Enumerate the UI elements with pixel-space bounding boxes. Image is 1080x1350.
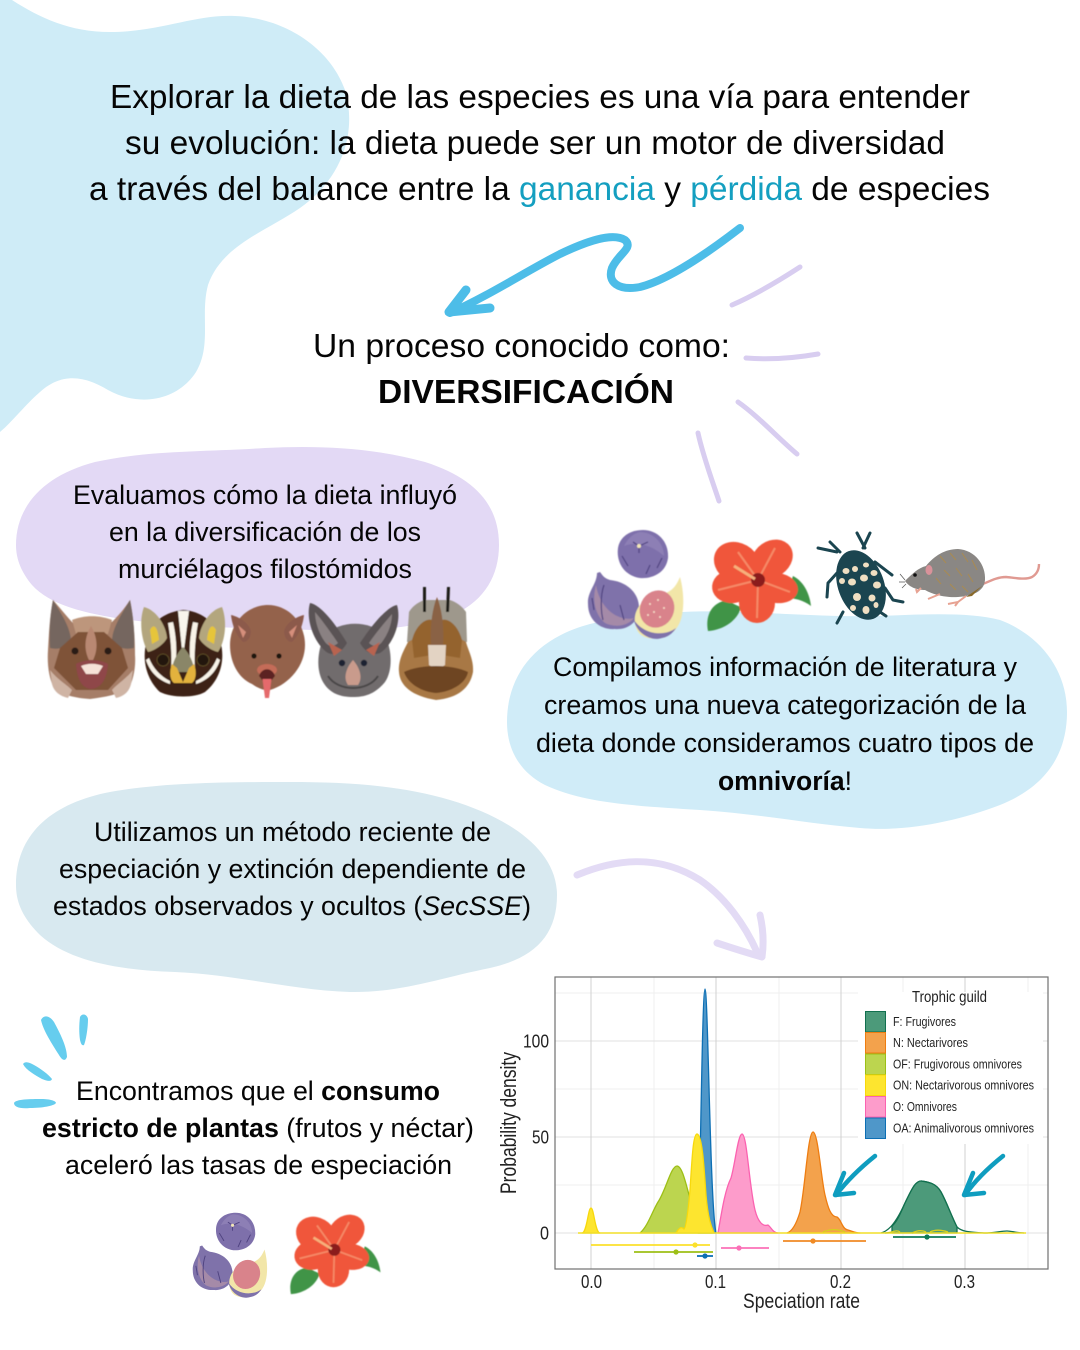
panel: grey-blue bubble — [16, 782, 557, 992]
text: grey-blue bubble: estados observados y ocultos (SecSSE) — [53, 891, 531, 921]
icon: hibiscus — [706, 532, 811, 631]
text: conclusion: estricto de plantas (frutos y néctar) — [42, 1113, 474, 1143]
chart legend — [858, 989, 1043, 1144]
chart: x axis labels: 0.1 — [705, 1272, 726, 1292]
chart: x axis labels — [581, 1272, 975, 1313]
arrow: squiggle to diversification — [449, 228, 740, 313]
background blob: top-left — [0, 0, 349, 432]
arrow: curved purple to chart — [577, 862, 763, 957]
header text: su evolución: la dieta puede ser un motor de diversidad — [125, 125, 945, 162]
text: conclusion: Encontramos que el consumo — [76, 1076, 440, 1106]
chart legend: OF: Frugivorous omnivores — [893, 1056, 1022, 1072]
text: conclusion: aceleró las tasas de especiación — [65, 1150, 452, 1180]
header text: a través del balance entre la ganancia y pérdida de especies — [89, 171, 990, 208]
text: purple bubble: en la diversificación de los — [109, 517, 421, 547]
arrow: frugivores highlight — [964, 1156, 1003, 1195]
icon: figs small — [193, 1213, 267, 1298]
header text — [89, 79, 990, 208]
text: grey-blue bubble — [53, 817, 531, 921]
chart: y axis labels: 0 — [540, 1224, 549, 1244]
decorative rays: purple — [698, 267, 818, 501]
text: blue bubble: omnivoría! — [718, 766, 852, 796]
text: conclusion — [42, 1076, 474, 1180]
chart: median intervals — [591, 1234, 956, 1259]
text: grey-blue bubble: Utilizamos un método reciente de — [94, 817, 491, 847]
text: blue bubble: creamos una nueva categorización de la — [544, 690, 1026, 720]
chart legend: Trophic guild — [912, 989, 987, 1006]
chart legend: OA: Animalivorous omnivores — [893, 1120, 1034, 1136]
chart: y axis labels — [496, 1032, 549, 1244]
text: purple bubble — [73, 480, 457, 584]
icon: beetle — [818, 533, 903, 627]
icon: blue emphasis dashes — [14, 1015, 88, 1108]
text: purple bubble: Evaluamos cómo la dieta influyó — [73, 480, 457, 510]
chart: x axis labels: 0.3 — [954, 1272, 975, 1292]
panel: purple bubble — [16, 447, 499, 630]
icon: bat 1 — [48, 600, 135, 699]
chart: x axis labels: Speciation rate — [743, 1290, 860, 1313]
chart: x axis labels: 0.0 — [581, 1272, 602, 1292]
icon: bat faces — [48, 587, 473, 700]
panel: blue bubble — [507, 611, 1067, 829]
chart: y axis labels: 100 — [523, 1032, 549, 1052]
chart: y axis labels: 50 — [532, 1128, 549, 1148]
icon: bat 3 — [230, 605, 305, 698]
heading: process name: DIVERSIFICACIÓN — [378, 373, 674, 411]
chart legend: O: Omnivores — [893, 1099, 957, 1114]
icon: figs — [588, 530, 683, 639]
text: grey-blue bubble: especiación y extinción dependiente de — [59, 854, 526, 884]
chart: density curves — [578, 989, 1026, 1233]
chart legend: ON: Nectarivorous omnivores — [893, 1078, 1034, 1092]
chart legend: F: Frugivores — [893, 1014, 956, 1029]
heading: process name: Un proceso conocido como: — [313, 328, 730, 365]
icon: hibiscus small — [289, 1208, 380, 1294]
header text: Explorar la dieta de las especies es una vía para entender — [110, 79, 970, 116]
chart: y axis labels: Probability density — [496, 1052, 521, 1194]
icon: rat — [899, 549, 1039, 606]
arrow: nectarivores highlight — [835, 1156, 875, 1195]
text: blue bubble: dieta donde consideramos cuatro tipos de — [536, 728, 1034, 758]
text: blue bubble — [536, 652, 1034, 796]
icon: bat 5 — [399, 587, 473, 700]
chart: speciation rate density — [496, 977, 1048, 1313]
text: blue bubble: Compilamos información de literatura y — [553, 652, 1018, 682]
icon: bat 4 — [309, 603, 398, 697]
text: purple bubble: murciélagos filostómidos — [118, 554, 412, 584]
chart legend: N: Nectarivores — [893, 1035, 968, 1050]
heading: process name — [313, 328, 730, 411]
icon: bat 2 — [141, 607, 225, 696]
chart: x axis labels: 0.2 — [830, 1272, 851, 1292]
